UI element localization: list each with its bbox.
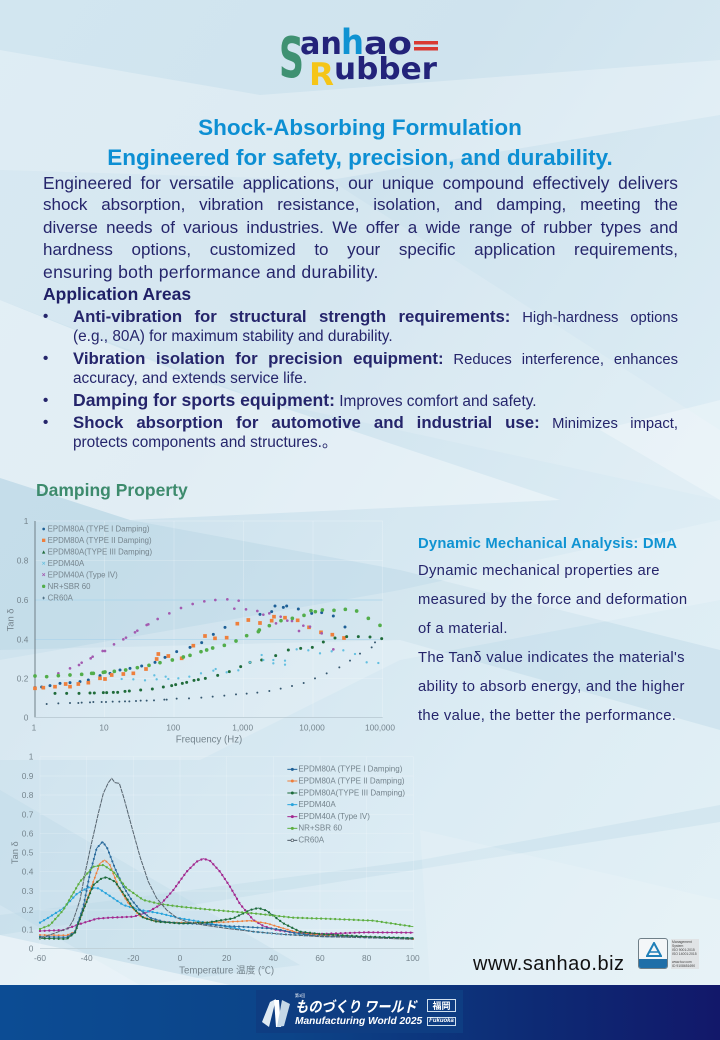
- line chart: tan delta vs temperature: [10, 752, 420, 977]
- bullet 3: Damping for sports equipment: Improves comfort and safety.: [73, 390, 537, 410]
- curve: EPDM80A type III: [40, 877, 413, 939]
- event logo: Manufacturing World 2025 Fukuoka: Manufacturing World 2025: [295, 1016, 422, 1027]
- title: Engineered for safety, precision, and durability.: [107, 144, 613, 170]
- bullet 1: •: [43, 308, 48, 325]
- line chart: tan delta vs temperature: 80: [362, 953, 372, 963]
- line chart: tan delta vs temperature: 100: [406, 953, 420, 963]
- series: EPDM80A type II: [35, 617, 344, 688]
- event logo: Manufacturing World 2025 Fukuoka: Fukuoka: [429, 1018, 454, 1024]
- series: EPDM80A type III: [55, 637, 382, 693]
- DMA body: measured by the force and deformation: [418, 592, 687, 608]
- line chart: tan delta vs temperature: 0.8: [22, 790, 34, 800]
- curve: NR+SBR 60: [40, 865, 413, 929]
- certification badge: ISO 14001:2015: [672, 952, 697, 956]
- series: EPDM40A: [122, 649, 378, 680]
- scatter chart: tan delta vs frequency: 0: [24, 712, 29, 722]
- certification badge: Management System: [672, 940, 692, 948]
- scatter chart: tan delta vs frequency: Tan δ: [6, 609, 16, 631]
- line chart: tan delta vs temperature: 0.6: [22, 828, 34, 838]
- bullet 1: Anti-vibration for structural strength requirements: High-hardness options: [73, 307, 678, 326]
- certification badge: www.tuv.com: [672, 960, 692, 964]
- line chart: tan delta vs temperature: 0.2: [22, 905, 34, 915]
- line legend: EPDM80A(TYPE III Damping): [298, 788, 405, 797]
- bullet 1: [43, 307, 678, 345]
- line chart: tan delta vs temperature: -20: [127, 953, 140, 963]
- line chart: tan delta vs temperature: 0.4: [22, 867, 34, 877]
- intro paragraph: hardness options, customized to your specific application requirements,: [43, 240, 678, 259]
- DMA body: Dynamic mechanical properties are: [418, 563, 660, 579]
- website url: www.sanhao.biz: [473, 953, 625, 975]
- scatter chart: tan delta vs frequency: Frequency (Hz): [176, 735, 242, 746]
- event logo: Manufacturing World 2025 Fukuoka: ものづくり ワールド: [295, 996, 417, 1017]
- footer band: [0, 985, 720, 1040]
- intro paragraph: diverse needs of various industries. We offer a wide range of rubber types and: [43, 218, 678, 237]
- title: [107, 115, 613, 170]
- series: EPDM80A type I: [35, 606, 345, 688]
- scatter chart: tan delta vs frequency: 10,000: [299, 722, 325, 732]
- line chart: tan delta vs temperature: 0.9: [22, 771, 34, 781]
- line chart: tan delta vs temperature: 0.1: [22, 924, 34, 934]
- intro paragraph: shock absorption, vibration resistance, isolation, and damping, meeting the: [43, 195, 678, 214]
- scatter legend: EPDM40A (Type IV): [48, 570, 118, 579]
- line legend: [287, 765, 405, 845]
- logo: Sanhao Rubber: S: [279, 26, 304, 90]
- line chart: tan delta vs temperature: 20: [222, 953, 232, 963]
- line chart: tan delta vs temperature: 0.7: [22, 809, 34, 819]
- scatter chart: tan delta vs frequency: 100,000: [365, 722, 395, 732]
- scatter legend: EPDM80A (TYPE I Damping): [48, 525, 150, 534]
- logo: Sanhao Rubber: [279, 24, 438, 90]
- title: Shock-Absorbing Formulation: [198, 115, 522, 140]
- logo: Sanhao Rubber: ao: [364, 26, 412, 62]
- line chart: tan delta vs temperature: -40: [81, 953, 93, 963]
- DMA body: The Tanδ value indicates the material's: [418, 650, 685, 666]
- line chart: tan delta vs temperature: Tan δ: [10, 841, 20, 864]
- intro paragraph: Engineered for versatile applications, our unique compound effectively delivers: [43, 173, 678, 193]
- heading: application areas: Application Areas: [43, 284, 191, 304]
- scatter chart: tan delta vs frequency: 1: [32, 722, 37, 732]
- bullet 4: [43, 413, 678, 451]
- scatter legend: [42, 525, 152, 602]
- DMA body: ability to absorb energy, and the higher: [418, 679, 685, 695]
- bullet 2: Vibration isolation for precision equipment: Reduces interference, enhances: [73, 349, 678, 368]
- curve: EPDM40A type IV: [40, 859, 413, 934]
- DMA body: of a material.: [418, 621, 508, 637]
- bullet 4: •: [43, 414, 48, 431]
- DMA heading: Dynamic Mechanical Analysis: DMA: [418, 536, 677, 552]
- certification badge: ID 9108651690: [672, 964, 695, 968]
- line legend: EPDM40A: [298, 800, 336, 809]
- line chart: tan delta vs temperature: Temperature 温度 (℃): [179, 965, 274, 977]
- bullet 1: (e.g., 80A) for maximum stability and durability.: [73, 328, 393, 345]
- DMA body: [418, 563, 687, 724]
- scatter chart: tan delta vs frequency: 1,000: [232, 722, 253, 732]
- certification badge: [638, 938, 699, 969]
- scatter legend: CR60A: [48, 593, 74, 602]
- bullet 4: protects components and structures.。: [73, 434, 337, 451]
- line legend: EPDM80A (TYPE II Damping): [298, 776, 405, 785]
- certification badge: ISO 9001:2015: [672, 948, 695, 952]
- line legend: EPDM80A (TYPE I Damping): [298, 765, 403, 774]
- scatter chart: tan delta vs frequency: [6, 516, 395, 746]
- scatter legend: NR+SBR 60: [48, 582, 91, 591]
- line chart: tan delta vs temperature: -60: [34, 953, 46, 963]
- icon: M mark: [262, 999, 290, 1027]
- event logo: Manufacturing World 2025 Fukuoka: 第3回: [295, 993, 305, 998]
- event logo: Manufacturing World 2025 Fukuoka: 福岡: [432, 999, 450, 1012]
- bullet 2: •: [43, 350, 48, 367]
- intro paragraph: ensuring both performance and durability.: [43, 262, 379, 282]
- scatter chart: tan delta vs frequency: 0.2: [17, 674, 29, 684]
- scatter chart: tan delta vs frequency: 0.4: [17, 634, 29, 644]
- scatter legend: EPDM40A: [48, 559, 85, 568]
- curve: EPDM80A type I: [40, 842, 413, 938]
- heading: damping property: Damping Property: [36, 480, 188, 500]
- bullet 2: accuracy, and extends service life.: [73, 370, 307, 387]
- logo: Sanhao Rubber: an: [300, 26, 342, 62]
- bullet 3: •: [43, 392, 48, 409]
- series: CR60A: [47, 642, 375, 704]
- scatter legend: EPDM80A(TYPE III Damping): [48, 548, 152, 557]
- DMA body: the value, the better the performance.: [418, 708, 676, 724]
- curve: EPDM80A type II: [40, 860, 413, 939]
- scatter chart: tan delta vs frequency: 100: [166, 722, 181, 732]
- line legend: CR60A: [298, 836, 325, 845]
- DMA explanation text: [418, 536, 687, 724]
- series: EPDM40A type IV: [58, 599, 333, 673]
- intro paragraph: [43, 173, 678, 282]
- line chart: tan delta vs temperature: 1: [29, 752, 34, 762]
- series: NR+SBR 60: [35, 609, 380, 677]
- application areas bullet list: [43, 307, 678, 451]
- curve: CR60A: [40, 778, 413, 939]
- scatter chart: tan delta vs frequency: 1: [24, 516, 29, 526]
- event logo: Manufacturing World 2025 Fukuoka: [256, 990, 463, 1033]
- bullet 2: [43, 349, 678, 387]
- bullet 4: Shock absorption for automotive and industrial use: Minimizes impact,: [73, 413, 678, 432]
- curve: EPDM40A: [40, 887, 413, 938]
- line chart: tan delta vs temperature: 60: [315, 953, 325, 963]
- scatter chart: tan delta vs frequency: 10: [99, 722, 109, 732]
- scatter legend: EPDM80A (TYPE II Damping): [48, 536, 152, 545]
- scatter chart: tan delta vs frequency: 0.6: [17, 595, 29, 605]
- line chart: tan delta vs temperature: 0: [178, 953, 183, 963]
- scatter chart: tan delta vs frequency: 0.8: [17, 555, 29, 565]
- logo: Sanhao Rubber: ubber: [334, 52, 437, 87]
- line chart: tan delta vs temperature: 0: [29, 943, 34, 953]
- line chart: tan delta vs temperature: 0.3: [22, 886, 34, 896]
- logo: Sanhao Rubber: h: [341, 24, 364, 63]
- line chart: tan delta vs temperature: 0.5: [22, 848, 34, 858]
- line legend: NR+SBR 60: [298, 824, 343, 833]
- line chart: tan delta vs temperature: 40: [269, 953, 278, 963]
- line legend: EPDM40A (Type IV): [298, 812, 370, 821]
